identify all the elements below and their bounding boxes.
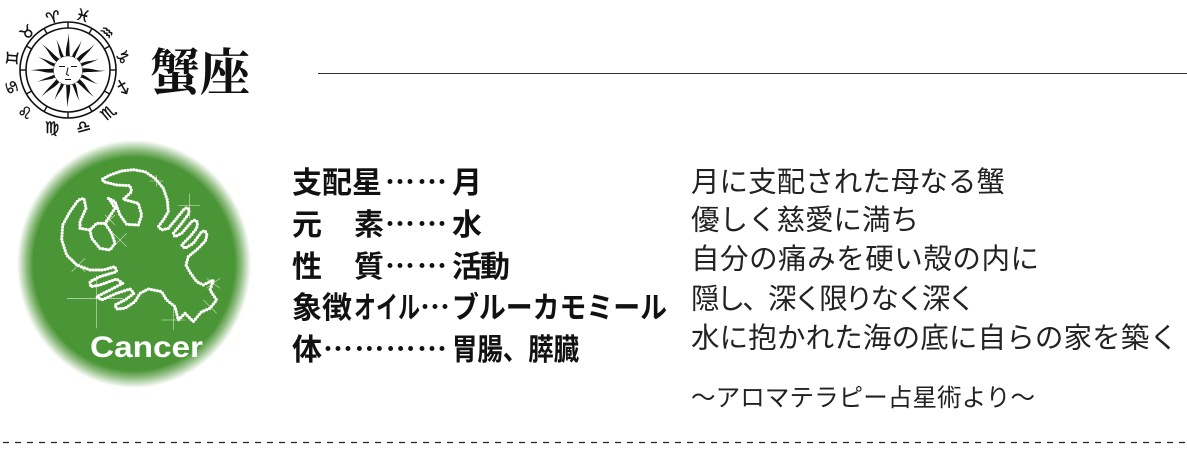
emblem label: Cancer (90, 331, 203, 364)
title: 蟹座 (150, 45, 252, 101)
text block: attributes: 活動 (452, 251, 510, 284)
text block: attributes: 元 (292, 209, 322, 242)
text block: attributes: 胃腸、膵臓 (452, 334, 579, 367)
text block: poem: 水に抱かれた海の底に自らの家を築く (691, 322, 1178, 354)
text block: attributes: オイル (354, 292, 420, 325)
text block: attributes: 月 (452, 167, 482, 200)
icon: zodiac wheel with sun: ♉︎ (16, 20, 39, 44)
crab constellation (62, 170, 220, 330)
icon: zodiac wheel with sun: ♑︎ (111, 48, 134, 67)
text block: attributes: 性 (292, 251, 322, 284)
text block: attributes: ブルーカモミール (452, 291, 667, 325)
dashed divider (3, 442, 1187, 444)
text block: attributes: … (420, 283, 450, 327)
icon: zodiac wheel with sun: ♐︎ (111, 77, 134, 96)
icon: zodiac wheel with sun: ♈︎ (44, 6, 63, 29)
icon: zodiac wheel with sun: ♓︎ (73, 4, 92, 27)
text block: attributes: …… (385, 200, 447, 244)
panel: cancer emblem (17, 140, 251, 388)
icon: zodiac wheel with sun: ♋︎ (0, 77, 23, 97)
text block: poem (691, 166, 1178, 354)
text block: poem: 月に支配された母なる蟹 (691, 166, 1005, 198)
text block: attributes: 質 (354, 251, 384, 284)
text block: attributes: 体 (292, 334, 322, 367)
source note: 〜アロマテラピー占星術より〜 (691, 384, 1035, 412)
icon: zodiac wheel with sun (0, 4, 134, 138)
text block: attributes: 素 (354, 209, 384, 242)
text block: poem: 優しく慈愛に満ち (691, 204, 919, 236)
text block: poem: 自分の痛みを硬い殻の内に (691, 244, 1039, 276)
icon: zodiac wheel with sun: ♏︎ (97, 100, 120, 124)
text block: attributes: …… (385, 242, 447, 286)
sparkles (67, 175, 220, 330)
text block: attributes: 支配星 (292, 167, 382, 200)
icon: zodiac wheel with sun: ♌︎ (15, 101, 34, 124)
icon: zodiac wheel with sun: ♒︎ (95, 20, 118, 44)
header rule (318, 72, 1187, 74)
text block: attributes: …… (385, 158, 447, 202)
text block: poem: 隠し、深く限りなく深く (691, 284, 976, 316)
icon: zodiac wheel with sun: ♎︎ (74, 115, 93, 138)
text block: attributes: 象徴 (292, 292, 352, 325)
text block: attributes: ………… (323, 325, 447, 369)
text block: attributes: 水 (452, 209, 482, 242)
text block: attributes (292, 158, 667, 369)
icon: zodiac wheel with sun: ♊︎ (2, 50, 23, 66)
icon: zodiac wheel with sun: ♍︎ (45, 118, 59, 137)
